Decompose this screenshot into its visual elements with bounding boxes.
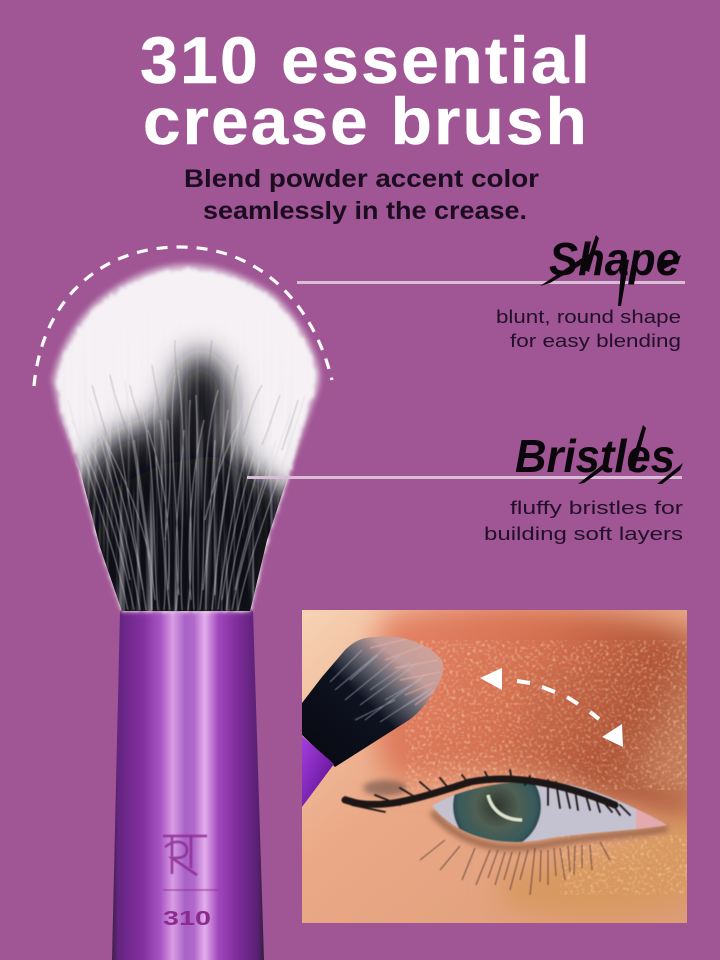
text: shape description: blunt, round shape	[496, 306, 681, 327]
leader line: shape	[297, 281, 685, 284]
lower lid glitter	[560, 835, 687, 895]
title	[140, 24, 592, 159]
brush bristles	[48, 260, 324, 616]
title: crease brush	[143, 85, 589, 159]
text: bristles description	[484, 497, 683, 544]
mini brush hairs	[330, 648, 432, 722]
shadow around eye socket	[575, 773, 687, 822]
subtitle: seamlessly in the crease.	[203, 197, 527, 225]
text: shape description: for easy blending	[510, 330, 681, 351]
subtitle	[184, 165, 539, 225]
gold shimmer under eye	[500, 815, 700, 917]
label: Shape: Shape	[549, 233, 680, 285]
dark glitter texture	[520, 670, 687, 800]
text: bristles description: fluffy bristles for	[510, 497, 683, 518]
lower rim shadow	[432, 812, 668, 848]
lower lashes	[420, 840, 610, 895]
mini brush pink tips	[370, 638, 440, 705]
brush handle	[112, 609, 264, 960]
text: bristles description: building soft layers	[484, 523, 683, 544]
socket smudge	[363, 780, 407, 796]
label: Shape	[540, 233, 681, 306]
eye	[432, 782, 667, 843]
text: shape description	[496, 306, 681, 351]
leader line: bristles	[247, 476, 682, 479]
mini brush bristles	[302, 636, 444, 767]
double arrow: blending direction	[480, 668, 623, 747]
dashed arc marking brush shape	[34, 247, 332, 386]
title: 310 essential	[140, 24, 592, 98]
upper lashes	[345, 770, 630, 815]
handle logo	[163, 836, 218, 890]
bristle hairs	[68, 370, 305, 610]
eyeshadow on lid	[363, 610, 687, 822]
subtitle: Blend powder accent color	[184, 165, 539, 193]
label: Bristles: Bristles	[515, 430, 675, 482]
dark hairs in white tips	[92, 340, 298, 450]
mini brush handle	[302, 736, 334, 807]
photo: brush applying eyeshadow	[300, 604, 710, 923]
handle number: 310	[163, 908, 211, 930]
glitter texture	[405, 640, 687, 790]
